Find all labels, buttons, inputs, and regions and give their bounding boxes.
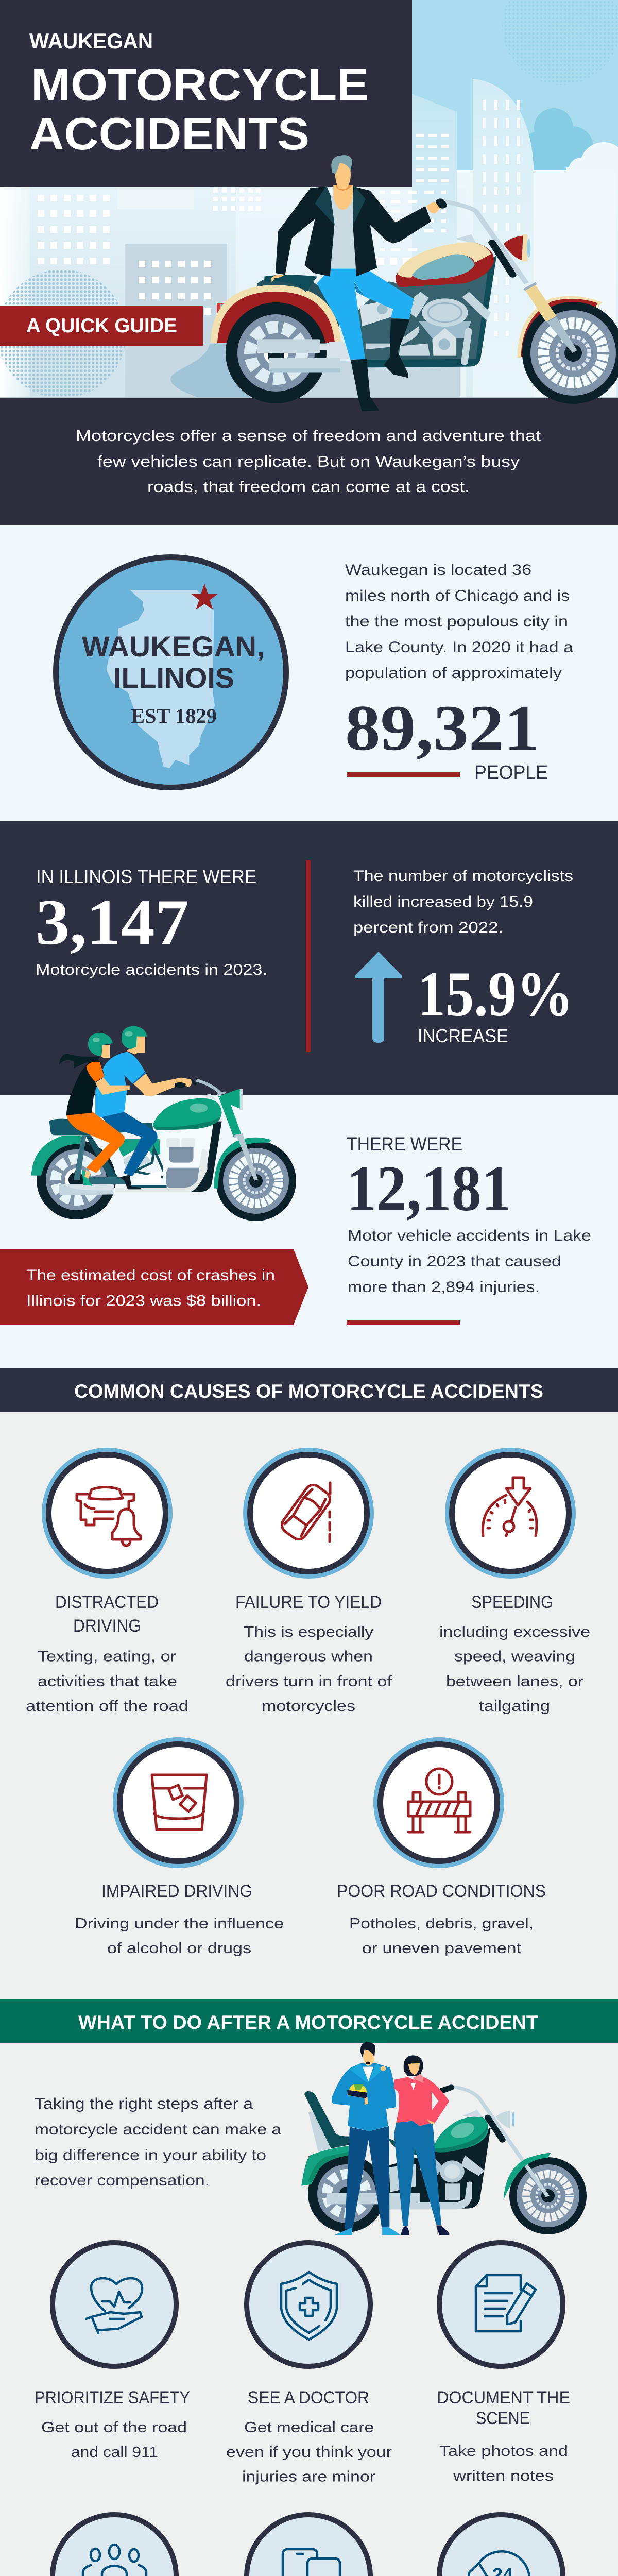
stat: 12,181 accidents: THERE WERE: [347, 1133, 462, 1155]
text: Waukegan description: population of approximately: [345, 665, 562, 682]
cause: poor road conditions: Potholes, debris, gravel,: [349, 1916, 534, 1932]
badge: Waukegan Illinois: EST 1829: [131, 704, 217, 727]
icon: road barrier: [373, 1737, 504, 1868]
section header: what to do: [0, 1999, 618, 2043]
stat: 89,321 people: 89,321: [345, 692, 539, 764]
intro band background: [0, 398, 618, 525]
text: taking the right steps: motorcycle accident can make a: [35, 2121, 281, 2138]
man rider: [101, 1112, 158, 1176]
text: Waukegan description: Waukegan is located 36: [345, 562, 531, 579]
title: Motorcycle Accidents: [29, 59, 369, 159]
intro text: roads, that freedom can come at a cost.: [147, 478, 470, 496]
icon: heart in hand: [53, 2243, 176, 2366]
text: motorcyclists killed: percent from 2022.: [353, 919, 503, 936]
cause: impaired driving: IMPAIRED DRIVING: [101, 1882, 252, 1901]
step: prioritize safety: and call 911: [71, 2444, 158, 2461]
cause: impaired driving: Driving under the influence: [75, 1916, 284, 1932]
step: contact an attorney: [439, 2515, 566, 2576]
step: see a doctor: even if you think your: [226, 2444, 392, 2461]
step: see a doctor: injuries are minor: [242, 2469, 375, 2485]
step: document the scene: [437, 2243, 570, 2484]
title: Motorcycle Accidents: MOTORCYCLE: [31, 59, 369, 110]
stat: 12,181 accidents: [347, 1133, 591, 1325]
step: prioritize safety: Get out of the road: [41, 2419, 187, 2436]
badge: Waukegan Illinois: ILLINOIS: [113, 662, 234, 694]
section header: what to do: WHAT TO DO AFTER A MOTORCYCLE ACCIDENT: [78, 2012, 538, 2033]
cause: impaired driving: [75, 1737, 284, 1957]
title block: [0, 0, 412, 187]
cause: speeding: between lanes, or: [446, 1673, 583, 1690]
arrow: up: [355, 952, 402, 1043]
cause: failure to yield: [226, 1448, 392, 1715]
cause: speeding: including excessive: [439, 1624, 590, 1640]
woman standing: [394, 2121, 441, 2226]
step: report the accident: [230, 2515, 390, 2576]
intro text: [76, 427, 541, 496]
step: document the scene: DOCUMENT THE: [437, 2388, 570, 2408]
panel: causes background: [0, 1412, 618, 1999]
text: taking the right steps: Taking the right steps after a: [35, 2095, 253, 2112]
callout: cost of crashes: [0, 1249, 308, 1325]
text: Waukegan description: the the most populous city in: [345, 613, 568, 630]
ribbon: a quick guide: [0, 306, 203, 346]
callout: cost of crashes: Illinois for 2023 was $8 billion.: [26, 1292, 261, 1310]
icon: medical shield: [247, 2243, 370, 2366]
cause: poor road conditions: or uneven pavement: [362, 1940, 521, 1957]
cause: distracted driving: [26, 1448, 188, 1715]
text: Waukegan description: Lake County. In 2020 it had a: [345, 639, 573, 656]
stat: 3,147 accidents: 3,147: [36, 887, 189, 958]
step: document the scene: Take photos and: [439, 2443, 568, 2460]
step: document the scene: SCENE: [476, 2409, 530, 2428]
man standing: [345, 2126, 389, 2229]
cause: failure to yield: dangerous when: [244, 1649, 373, 1665]
step: prioritize safety: [35, 2243, 190, 2461]
woman rider: [66, 1111, 125, 1173]
panel: steps background: [0, 2043, 618, 2576]
illustration: couple riding motorcycle: [31, 1026, 296, 1221]
man: jacket: [276, 187, 335, 277]
cause: distracted driving: DISTRACTED: [55, 1592, 159, 1612]
ribbon: a quick guide: A QUICK GUIDE: [26, 315, 177, 337]
step: talk to witnesses: [24, 2515, 200, 2576]
stat: 12,181 accidents: County in 2023 that caused: [348, 1253, 561, 1270]
cause: impaired driving: of alcohol or drugs: [107, 1940, 251, 1957]
stat: 89,321 people: [345, 692, 548, 784]
front wheel: [522, 302, 618, 404]
cause: distracted driving: DRIVING: [73, 1616, 141, 1636]
badge: Waukegan Illinois: [56, 557, 286, 787]
panel: Illinois statistics: [0, 821, 618, 1095]
intro text: Motorcycles offer a sense of freedom and adventure that: [76, 427, 541, 445]
text: motorcyclists killed: [353, 868, 573, 936]
rear wheel: [226, 302, 327, 403]
section header: common causes: [0, 1368, 618, 1412]
cause: failure to yield: drivers turn in front of: [226, 1673, 392, 1690]
cause: speeding: speed, weaving: [454, 1649, 575, 1665]
icon: document and pencil: [439, 2243, 563, 2366]
text: motorcyclists killed: The number of motorcyclists: [353, 868, 573, 885]
woman hair: [59, 1054, 100, 1068]
stat: 15.9% increase: 15.9%: [417, 959, 573, 1029]
step: see a doctor: SEE A DOCTOR: [248, 2388, 369, 2408]
stat: 3,147 accidents: IN ILLINOIS THERE WERE: [36, 866, 256, 887]
cause: failure to yield: motorcycles: [262, 1698, 355, 1715]
stat: 15.9% increase: INCREASE: [418, 1025, 508, 1046]
text: Waukegan description: miles north of Chicago and is: [345, 587, 570, 604]
icon: car and bell: [42, 1448, 173, 1579]
section header: common causes: COMMON CAUSES OF MOTORCYCLE ACCIDENTS: [74, 1381, 543, 1402]
stat: 3,147 accidents: Motorcycle accidents in 2023.: [36, 961, 267, 978]
cause: poor road conditions: [337, 1737, 546, 1957]
step: document the scene: written notes: [453, 2468, 554, 2484]
man: boots: [351, 359, 380, 411]
step: prioritize safety: PRIORITIZE SAFETY: [35, 2388, 190, 2408]
illustration: couple standing by motorcycle: [301, 2042, 587, 2235]
icon: speedometer: [445, 1448, 576, 1579]
text: Waukegan description: [345, 562, 573, 682]
stat: 12,181 accidents: more than 2,894 injuries.: [348, 1279, 540, 1296]
callout: cost of crashes: The estimated cost of crashes in: [26, 1267, 275, 1284]
cause: failure to yield: This is especially: [244, 1624, 374, 1640]
cause: poor road conditions: POOR ROAD CONDITIONS: [337, 1882, 546, 1901]
cause: speeding: SPEEDING: [471, 1592, 553, 1612]
man: jeans: [317, 268, 414, 361]
stat: 12,181 accidents: Motor vehicle accidents in Lake: [348, 1227, 591, 1244]
rear fender: [211, 285, 341, 343]
stat: 89,321 people: PEOPLE: [474, 762, 548, 784]
cause: distracted driving: attention off the road: [26, 1698, 188, 1715]
cause: failure to yield: FAILURE TO YIELD: [235, 1592, 382, 1612]
title: Motorcycle Accidents: ACCIDENTS: [29, 108, 310, 159]
text: taking the right steps: [35, 2095, 281, 2189]
text: taking the right steps: big difference in your ability to: [35, 2147, 266, 2164]
icon: phone and message: [247, 2515, 370, 2576]
icon: group of people: [53, 2515, 176, 2576]
cause: distracted driving: Texting, eating, or: [38, 1649, 176, 1665]
badge: Waukegan Illinois: WAUKEGAN,: [82, 630, 265, 663]
step: see a doctor: [226, 2243, 392, 2485]
illustration: man with motorcycle: [211, 155, 618, 411]
cause: speeding: tailgating: [479, 1698, 550, 1715]
text: taking the right steps: recover compensation.: [35, 2172, 210, 2189]
man: head: [331, 155, 352, 189]
icon: 24 hour phone: [439, 2515, 563, 2576]
stat: 3,147 accidents: [36, 866, 267, 978]
text: motorcyclists killed: killed increased by 15.9: [353, 893, 533, 910]
step: see a doctor: Get medical care: [244, 2419, 374, 2436]
intro text: few vehicles can replicate. But on Waukegan’s busy: [97, 452, 520, 470]
hero: city background: [0, 0, 618, 403]
front fender: [517, 296, 603, 358]
man: shirt: [331, 196, 356, 269]
title: Waukegan: WAUKEGAN: [29, 29, 153, 53]
icon: glass: [113, 1737, 244, 1868]
panel: Lake County statistics: [0, 1095, 618, 1368]
icon: car crossing line: [243, 1448, 374, 1579]
cause: distracted driving: activities that take: [38, 1673, 177, 1690]
panel: about Waukegan: [0, 525, 618, 821]
cause: speeding: [439, 1448, 590, 1715]
stat: 12,181 accidents: 12,181: [347, 1153, 511, 1225]
